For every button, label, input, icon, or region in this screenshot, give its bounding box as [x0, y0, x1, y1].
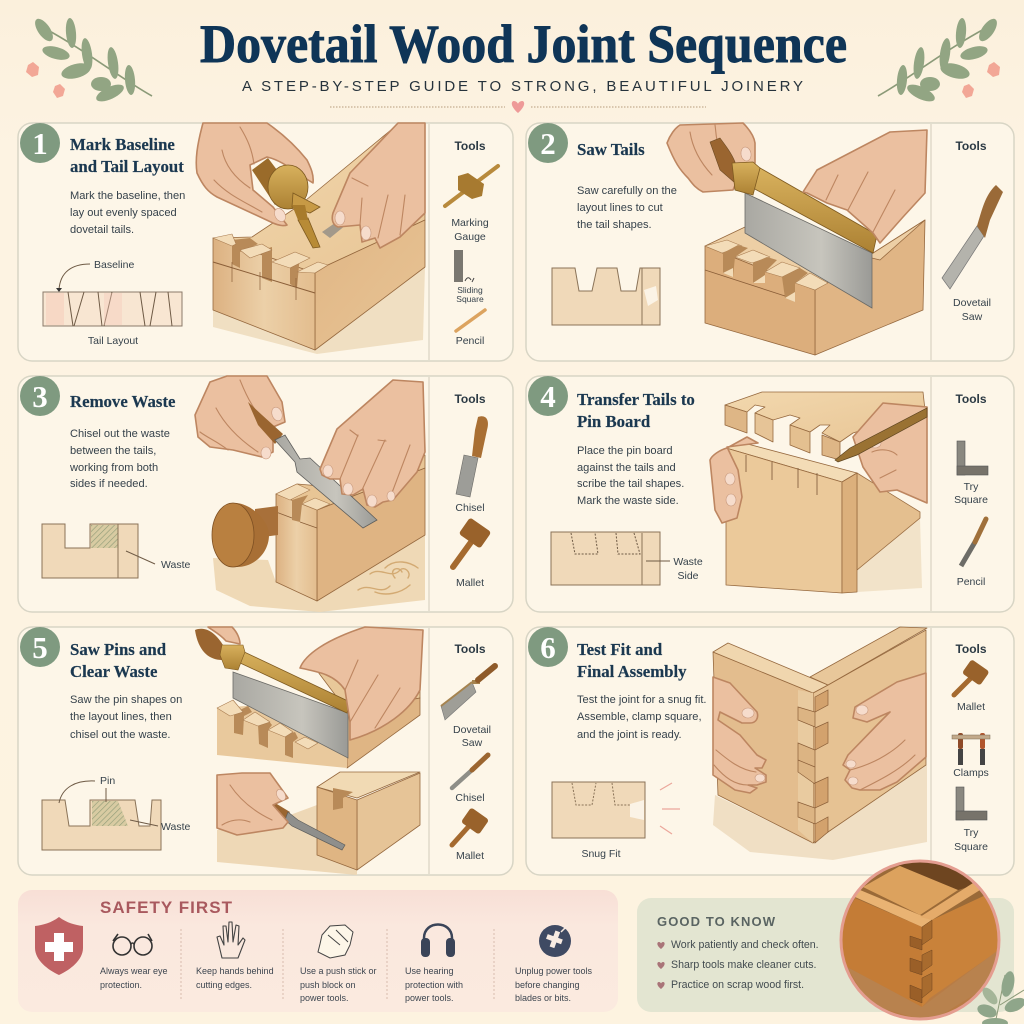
instructions: between the tails,	[70, 445, 156, 457]
instructions: Assemble, clamp square,	[577, 711, 702, 723]
tools column: Mallet	[456, 850, 484, 862]
icon: pencil	[961, 519, 986, 566]
tools column: Try	[964, 481, 979, 493]
safety item: push stick: power tools.	[300, 993, 349, 1003]
instructions: the layout lines, then	[70, 711, 172, 723]
panel: step 6	[526, 627, 1014, 875]
safety item: unplug: before changing	[515, 980, 580, 990]
instructions: and the joint is ready.	[577, 729, 682, 741]
diagram: pin and waste: Waste	[161, 821, 191, 833]
hand: left	[196, 123, 313, 226]
safety item: hearing: power tools.	[405, 993, 454, 1003]
step number badge: 3	[32, 379, 48, 414]
title: Dovetail Wood Joint Sequence	[200, 14, 847, 74]
upper block	[318, 665, 420, 712]
icon: hand	[217, 922, 245, 958]
icon: mallet	[453, 517, 491, 567]
shavings	[358, 562, 418, 594]
tools column: Tools	[955, 642, 987, 656]
step number badge	[528, 627, 568, 667]
icon: mallet	[452, 807, 489, 845]
subtitle: A STEP-BY-STEP GUIDE TO STRONG, BEAUTIFUL JOINERY	[242, 78, 803, 95]
instructions: Mark the baseline, then	[70, 190, 185, 202]
panel: step 1	[18, 123, 513, 361]
icon: bottom corner leaves	[976, 970, 1024, 1024]
marking gauge	[252, 158, 320, 248]
pencil	[835, 408, 927, 462]
icon: chisel	[456, 416, 488, 497]
icon: safety glasses	[113, 934, 152, 955]
diagram: waste area	[42, 524, 191, 578]
tools column: Square	[954, 841, 988, 853]
instructions: lay out evenly spaced	[70, 207, 177, 219]
instructions: dovetail tails.	[70, 224, 134, 236]
instructions: chisel out the waste.	[70, 729, 171, 741]
instructions: Saw carefully on the	[577, 185, 677, 197]
instructions: scribe the tail shapes.	[577, 478, 684, 490]
icon: shield	[35, 917, 83, 975]
step number badge	[528, 376, 568, 416]
tools column: Square	[954, 494, 988, 506]
chisel	[248, 402, 377, 528]
heading: Final Assembly	[577, 662, 687, 681]
tools column: Pencil	[456, 335, 484, 347]
hand: lower	[217, 773, 288, 835]
tools column	[952, 642, 990, 853]
tools column: Saw	[462, 737, 483, 749]
hand: left	[195, 376, 285, 457]
pin board	[726, 442, 857, 482]
icon: unplug	[539, 925, 571, 957]
panel: step 4	[526, 376, 1014, 612]
hand: right	[332, 123, 425, 248]
saw handle	[195, 627, 245, 670]
hand: right	[803, 130, 927, 243]
safety item: unplug: Unplug power tools	[515, 966, 593, 976]
panel: good to know	[637, 898, 1014, 1012]
heading: and Tail Layout	[70, 157, 184, 176]
hand: left	[713, 677, 766, 793]
step number badge: 6	[540, 630, 556, 665]
hand: upper	[300, 627, 423, 740]
tail board	[725, 392, 925, 442]
icon: clamps	[952, 719, 990, 765]
tools column	[445, 139, 498, 347]
step number badge: 2	[540, 126, 556, 161]
step number badge: 1	[32, 126, 48, 161]
tools column: Chisel	[455, 502, 485, 514]
icon: marking gauge	[445, 166, 498, 206]
heading: Mark Baseline	[70, 135, 175, 154]
tools column: Gauge	[454, 231, 486, 243]
icon: left leaf sprig	[26, 16, 152, 105]
safety item: hands: Keep hands behind	[196, 966, 274, 976]
step number badge	[20, 627, 60, 667]
tools column: Try	[964, 827, 979, 839]
icon: dovetail saw	[942, 185, 1003, 289]
icon: mallet	[954, 659, 990, 695]
diagram: tail layout	[43, 259, 182, 347]
heart divider	[330, 101, 706, 113]
tools column: Dovetail	[953, 297, 991, 309]
step number badge: 5	[32, 630, 48, 665]
tip list: Work patiently and check often.	[671, 939, 819, 951]
step number badge	[20, 123, 60, 163]
safety item: hands: cutting edges.	[196, 980, 252, 990]
tools column	[942, 139, 1003, 323]
tools column: Mallet	[456, 577, 484, 589]
tools column: Mallet	[957, 701, 985, 713]
instructions: sides if needed.	[70, 478, 148, 490]
diagram: waste side: Side	[677, 570, 699, 582]
heading: Clear Waste	[70, 662, 158, 681]
diagram: waste side: Waste	[673, 556, 703, 568]
tip list: Practice on scrap wood first.	[671, 979, 804, 991]
hand: right	[843, 673, 926, 790]
instructions: Mark the waste side.	[577, 495, 679, 507]
safety heading: SAFETY FIRST	[100, 898, 233, 917]
tools column: Pencil	[957, 576, 985, 588]
safety item: hearing: protection with	[405, 980, 463, 990]
illustration: chiselling	[195, 376, 425, 612]
instructions: Saw the pin shapes on	[70, 694, 182, 706]
tools column: Tools	[454, 139, 486, 153]
tools column: Chisel	[455, 792, 485, 804]
hand: right	[320, 380, 425, 507]
tools column: Saw	[962, 311, 983, 323]
safety item: push stick: push block on	[300, 980, 356, 990]
diagram: pin and waste: Pin	[100, 775, 115, 787]
tools column	[954, 392, 988, 588]
icon: try square	[956, 787, 987, 820]
tools column: Clamps	[953, 767, 989, 779]
chisel	[257, 792, 345, 850]
tools column	[441, 642, 495, 862]
safety item: hearing: Use hearing	[405, 966, 454, 976]
tools column: Tools	[955, 392, 987, 406]
instructions: the tail shapes.	[577, 219, 652, 231]
tools column: Dovetail	[453, 724, 491, 736]
instructions: Place the pin board	[577, 445, 673, 457]
diagram: waste side	[551, 532, 703, 585]
instructions: layout lines to cut	[577, 202, 663, 214]
tools column: Tools	[955, 139, 987, 153]
illustration: scribing the pin board	[710, 392, 927, 593]
hand: left	[710, 437, 758, 523]
heading: Pin Board	[577, 412, 651, 431]
icon: push block	[318, 925, 353, 958]
tools column	[453, 392, 491, 589]
heading: Saw Tails	[577, 140, 645, 159]
safety item: eye protection: Always wear eye	[100, 966, 168, 976]
tip list: Sharp tools make cleaner cuts.	[671, 959, 816, 971]
saw blade and back	[233, 650, 350, 758]
saw	[745, 168, 877, 308]
heading: GOOD TO KNOW	[657, 914, 776, 929]
photo: finished dovetail box	[838, 860, 1002, 1022]
heading: Test Fit and	[577, 640, 663, 659]
icon: pencil	[456, 310, 485, 331]
tools column: Tools	[454, 392, 486, 406]
tools column: Marking	[451, 217, 489, 229]
tools column: Sliding	[457, 285, 483, 295]
icon: ear defenders	[421, 924, 455, 957]
icon: dovetail saw	[441, 666, 495, 720]
safety item: push stick: Use a push stick or	[300, 966, 377, 976]
diagram: tail layout: Baseline	[94, 259, 134, 271]
heading: Transfer Tails to	[577, 390, 695, 409]
instructions: Chisel out the waste	[70, 428, 170, 440]
panel: step 2	[526, 123, 1014, 361]
icon: square	[454, 250, 474, 282]
tools column: Square	[456, 294, 484, 304]
icon: try square	[957, 441, 988, 475]
step number badge	[20, 376, 60, 416]
panel: step 5	[18, 627, 513, 875]
tip list	[657, 939, 819, 991]
diagram: pin and waste	[42, 775, 191, 850]
step number badge	[528, 123, 568, 163]
instructions: against the tails and	[577, 462, 676, 474]
header	[26, 14, 1000, 113]
panel: step 3	[18, 376, 513, 612]
mallet	[212, 503, 278, 567]
safety item: unplug: blades or bits.	[515, 993, 571, 1003]
safety item: eye protection: protection.	[100, 980, 142, 990]
saw handle	[710, 138, 760, 195]
illustration: sawing tails	[667, 123, 927, 355]
hand: right	[853, 403, 927, 503]
diagram: snug fit: Snug Fit	[581, 848, 621, 860]
lower block	[217, 805, 357, 875]
diagram: waste area: Waste	[161, 559, 191, 571]
diagram: saw cuts	[552, 268, 660, 325]
illustration: assembled joint	[713, 627, 927, 860]
diagram: tail layout: Tail Layout	[88, 335, 138, 347]
icon: right leaf sprig	[878, 16, 1000, 105]
diagram: snug fit	[552, 782, 680, 860]
illustration: marking the block	[196, 123, 425, 354]
panel: safety first	[18, 890, 618, 1012]
tools column: Tools	[454, 642, 486, 656]
instructions: Test the joint for a snug fit.	[577, 694, 706, 706]
icon: chisel	[452, 755, 488, 788]
heading: Remove Waste	[70, 392, 176, 411]
hand: left	[667, 123, 755, 192]
step number badge: 4	[540, 379, 556, 414]
illustration: sawing and chiselling pins	[195, 627, 423, 875]
instructions: working from both	[69, 462, 158, 474]
heading: Saw Pins and	[70, 640, 167, 659]
